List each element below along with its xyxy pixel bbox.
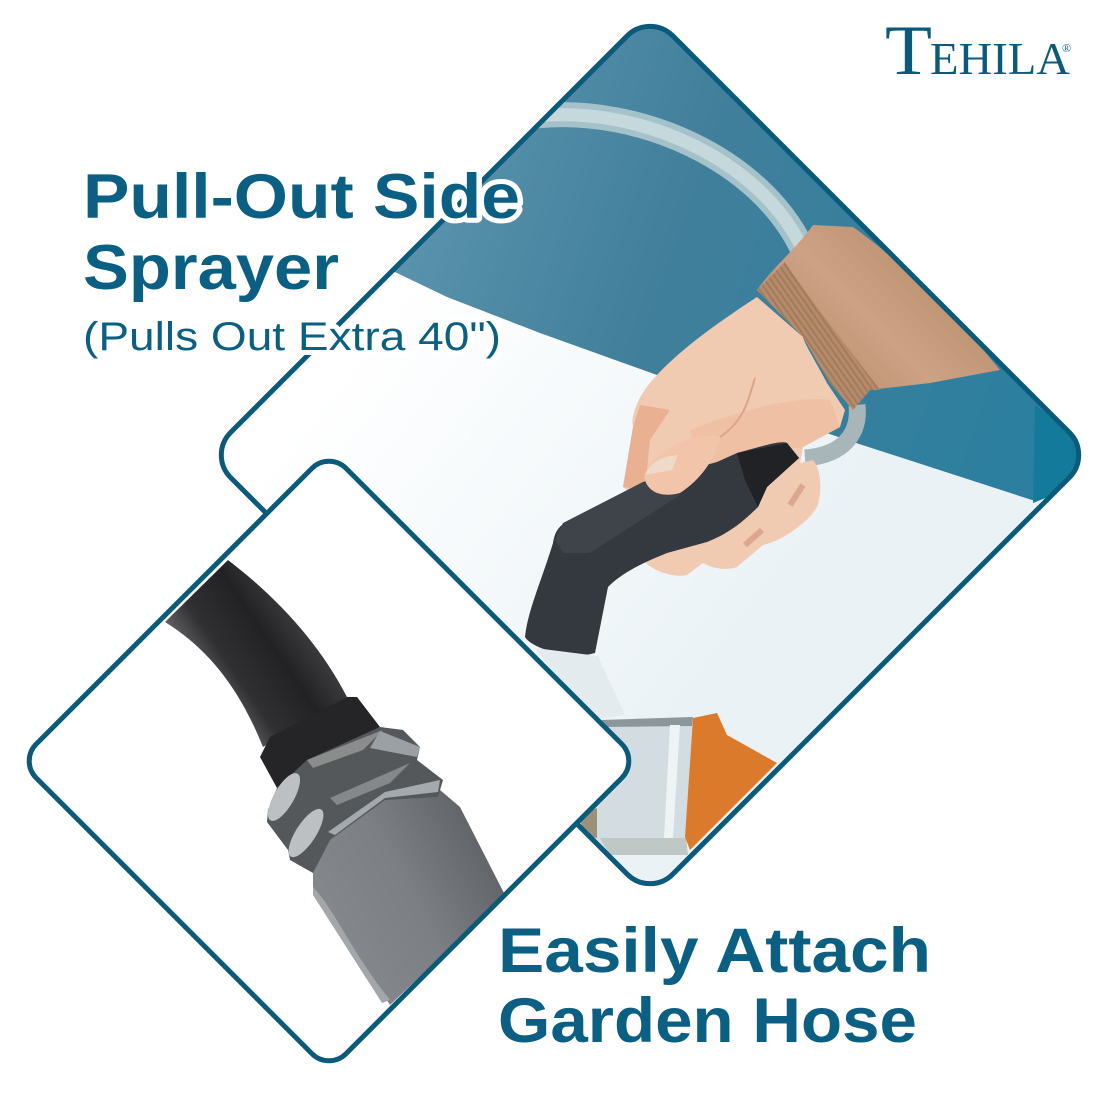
heading: pull-out side sprayer: Pull-Out Side [83,162,520,232]
heading: pull-out side sprayer: (Pulls Out Extra 40") [83,315,501,359]
logo: Tehila: ® [1062,41,1071,55]
logo: Tehila [885,12,1071,90]
icon: braided hose [535,115,857,458]
heading: easily attach garden hose: Easily Attach [498,916,931,986]
icon: hand [623,297,845,576]
panel: pull-out sprayer photo [200,0,1100,900]
icon: metal nut [262,727,443,873]
icon: black coupling [260,697,380,788]
icon: grey hose adapter [313,790,505,1005]
logo: Tehila: T [885,12,932,90]
finger shading [745,485,803,545]
wall [394,28,1048,500]
heading: easily attach garden hose [498,916,931,1056]
thumb [644,464,709,495]
icon: black hose [165,560,347,747]
logo: Tehila: EHILA [930,33,1070,84]
icon: paint brush [578,713,777,855]
heading: easily attach garden hose: Garden Hose [498,986,917,1056]
icon: sweater sleeve [757,225,1000,410]
heading: pull-out side sprayer: Sprayer [83,233,339,303]
icon: black sprayer head [525,442,799,656]
teal wall edge [1033,405,1076,503]
heading: pull-out side sprayer [83,162,520,359]
water stream [535,648,625,720]
panel: garden hose connector photo [19,451,639,1071]
